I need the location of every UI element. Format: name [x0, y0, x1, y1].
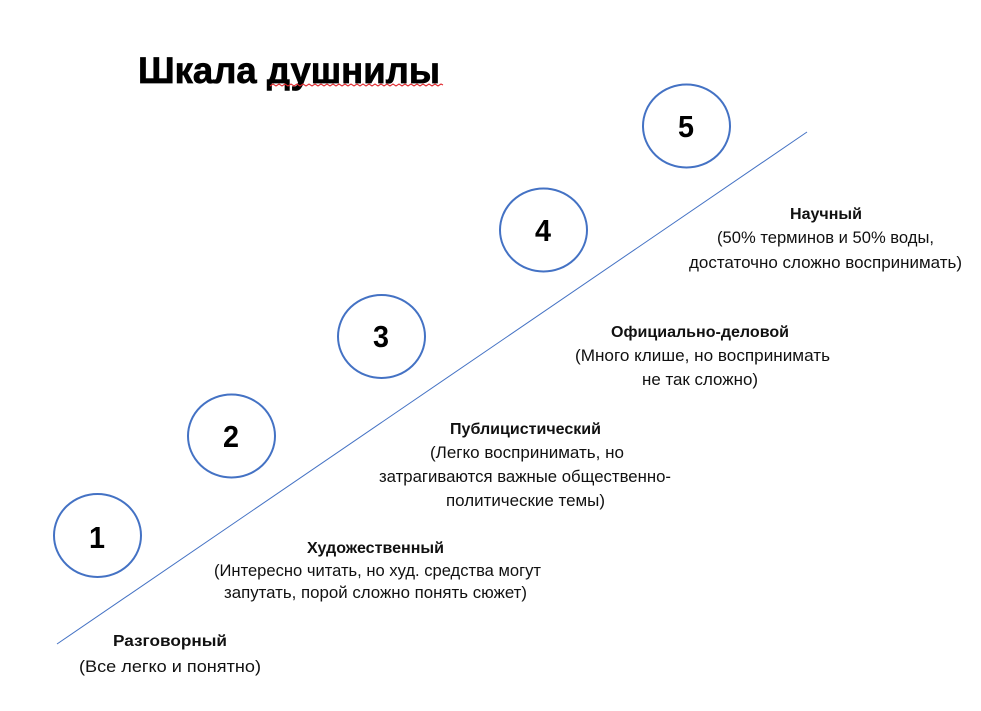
circle 4: 4 — [535, 213, 552, 248]
text: level 1: (Все легко и понятно) — [79, 658, 261, 676]
circle 1: 1 — [89, 520, 105, 555]
circle 3: 3 — [373, 319, 389, 354]
circle 2 — [188, 394, 275, 478]
text: level 1 — [79, 633, 261, 676]
circle 2: 2 — [223, 419, 239, 454]
text: level 2: Художественный — [307, 540, 444, 557]
text: level 5: (50% терминов и 50% воды, — [717, 229, 934, 247]
text: level 3: политические темы) — [446, 492, 605, 510]
circle 5: 5 — [678, 109, 694, 144]
circle 1 — [54, 494, 141, 577]
text: level 2: (Интересно читать, но худ. средства могут — [214, 562, 541, 580]
text: level 4: не так сложно) — [642, 371, 758, 389]
text: level 4: Официально-деловой — [611, 324, 789, 341]
text: level 3 — [379, 421, 671, 510]
text: level 2: запутать, порой сложно понять сюжет) — [224, 584, 527, 602]
text: level 5: достаточно сложно воспринимать) — [689, 254, 962, 272]
text: level 3: затрагиваются важные общественно- — [379, 468, 671, 486]
text: level 5 — [689, 206, 962, 272]
diagonal scale line — [57, 132, 807, 644]
circle 5 — [643, 84, 730, 168]
text: level 3: Публицистический — [450, 421, 601, 438]
text: level 2 — [214, 540, 541, 602]
text: level 1: Разговорный — [113, 633, 227, 650]
title: Шкала душнилы — [138, 50, 440, 91]
text: level 4: (Много клише, но воспринимать — [575, 347, 830, 365]
circle 3 — [338, 295, 425, 378]
circle 4 — [500, 188, 587, 272]
text: level 3: (Легко воспринимать, но — [430, 444, 624, 462]
text: level 4 — [575, 324, 830, 389]
text: level 5: Научный — [790, 206, 862, 223]
